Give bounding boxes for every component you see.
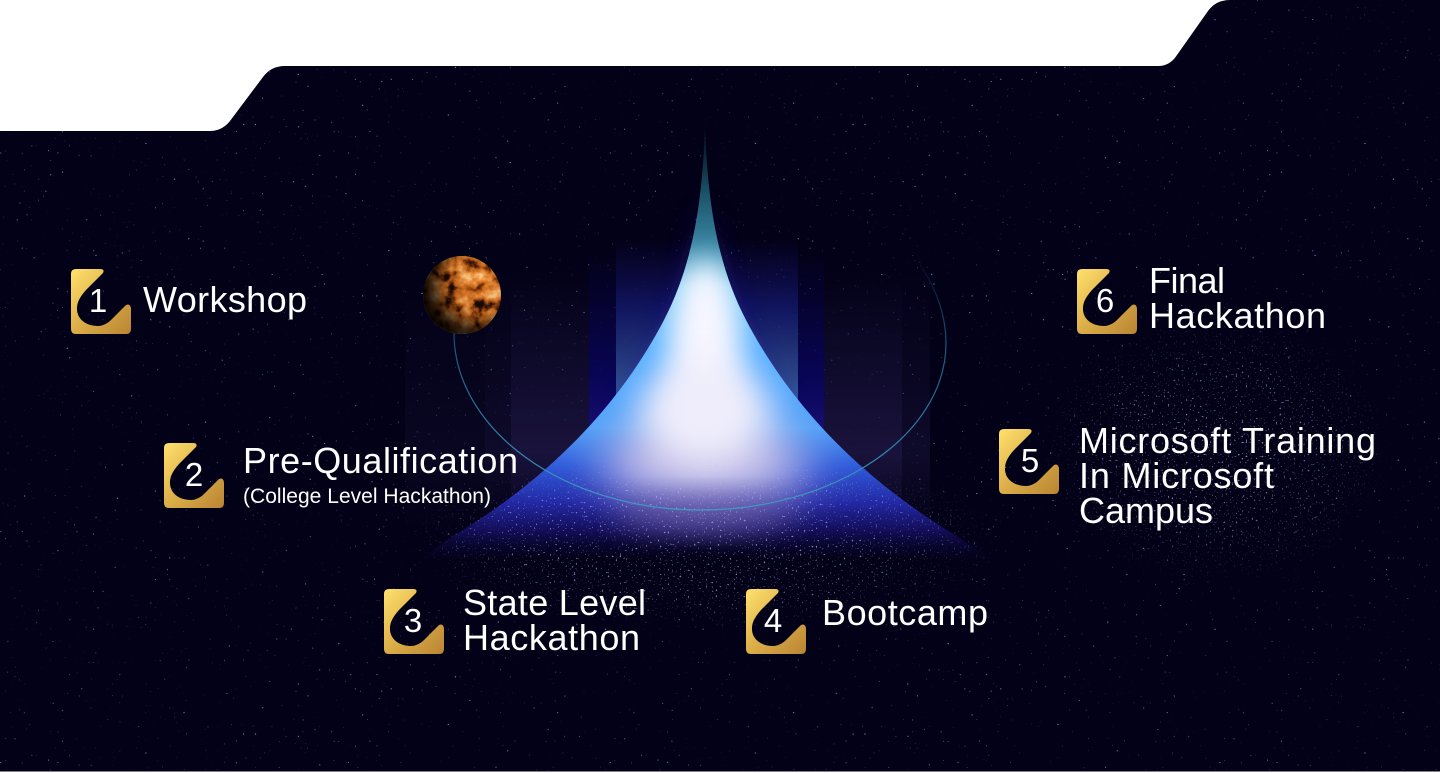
step 6: Final Hackathon: Final [1149, 260, 1225, 301]
step 1: Workshop: Workshop [143, 279, 307, 320]
step 1: Workshop [71, 269, 307, 334]
step 2: Pre-Qualification [164, 440, 518, 508]
step 5: Microsoft Training: 5 [1021, 442, 1039, 479]
step 4: Bootcamp [746, 589, 988, 654]
step 3: State Level Hackathon: 3 [404, 602, 422, 639]
step 4: Bootcamp: Bootcamp [822, 592, 988, 633]
star field: dense band at spire base [416, 462, 997, 627]
step 5: Microsoft Training [999, 420, 1376, 531]
step 5: Microsoft Training: In Microsoft [1079, 455, 1274, 496]
step 5: Microsoft Training: Microsoft Training [1079, 420, 1376, 461]
step 5: Microsoft Training: Campus [1079, 490, 1213, 531]
step 2: Pre-Qualification: Pre-Qualification [243, 440, 518, 481]
orbit ring [454, 265, 946, 510]
step 6: Final Hackathon: Hackathon [1149, 295, 1326, 336]
light spire [415, 120, 995, 562]
step 3: State Level Hackathon: Hackathon [463, 617, 640, 658]
spire glow halo [654, 215, 754, 338]
step 3: State Level Hackathon [384, 589, 644, 654]
step 2: Pre-Qualification: (College Level Hackathon) [243, 485, 491, 508]
step 1: Workshop: 1 [89, 282, 107, 319]
planet [423, 256, 501, 334]
star field: dense cluster right [1047, 320, 1387, 580]
light beams behind the spire [405, 248, 930, 501]
step 2: Pre-Qualification: 2 [185, 456, 203, 493]
step 6: Final Hackathon: 6 [1096, 282, 1114, 319]
step 4: Bootcamp: 4 [764, 602, 782, 639]
step 6: Final Hackathon [1077, 267, 1324, 334]
step 3: State Level Hackathon: State Level [463, 582, 646, 623]
